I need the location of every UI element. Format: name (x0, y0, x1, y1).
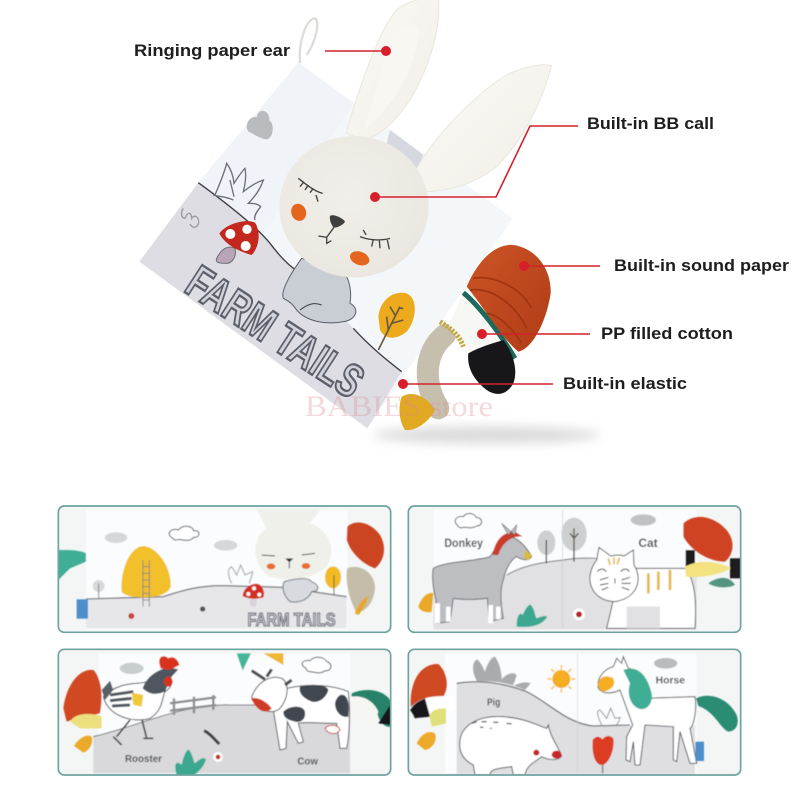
panel: rooster and cow page (58, 649, 392, 778)
red plush (411, 664, 447, 707)
callout: built-in sound paper: Built-in sound paper (614, 256, 789, 275)
sun icon (547, 665, 575, 693)
cloud icon (247, 111, 273, 139)
page title: FARM TAILS (247, 609, 336, 630)
hanging loop (300, 18, 317, 63)
donkey label: Donkey (444, 536, 483, 550)
dangling tail parts (399, 245, 551, 430)
main product: rabbit cloth book (139, 0, 600, 444)
rabbit body (283, 579, 318, 602)
rabbit body (283, 258, 356, 323)
grey plant (473, 657, 531, 690)
plant outline (229, 565, 253, 583)
rooster (102, 656, 179, 745)
plant outline (598, 708, 620, 726)
green plant (517, 605, 547, 627)
callout: built-in elastic: Built-in elastic (563, 374, 687, 393)
callout: built-in sound paper (519, 256, 789, 275)
pig label: Pig (487, 698, 500, 709)
panel: donkey and cat page (408, 506, 741, 632)
flower (573, 608, 585, 620)
cat (590, 547, 696, 628)
green plant (175, 750, 206, 778)
callout: built-in BB call (370, 114, 714, 202)
pig (460, 717, 562, 775)
grey cloud (631, 514, 656, 526)
watermark: BABIES store (305, 390, 493, 423)
yellow striped arm (70, 714, 102, 728)
callout: PP filled cotton (477, 324, 733, 343)
red plush (63, 670, 102, 722)
clouds (120, 663, 144, 674)
black and white tail (410, 696, 455, 718)
red plush (347, 523, 384, 568)
panel: pig and horse page (408, 649, 741, 775)
tulip (592, 736, 614, 773)
title on cover: FARM TAILS (177, 255, 373, 408)
mushroom icon (216, 221, 259, 263)
worm (204, 731, 219, 744)
rooster label: Rooster (125, 754, 162, 765)
horse (597, 657, 697, 765)
callout: ringing paper ear (134, 41, 391, 60)
grey tree (93, 580, 105, 592)
donkey (433, 523, 532, 623)
bunting (237, 653, 251, 671)
callout: built-in BB call: Built-in BB call (587, 114, 714, 133)
yellow stripe arm (429, 708, 446, 727)
yellow striped arm (685, 562, 731, 577)
label tag (695, 742, 704, 761)
rabbit tail ring (347, 567, 375, 613)
face details (289, 178, 390, 268)
rabbit head (255, 508, 331, 580)
green tail (696, 696, 738, 732)
yellow foot (74, 736, 92, 753)
flower (213, 752, 223, 762)
grey clouds (105, 532, 127, 543)
ground area (139, 183, 402, 428)
cloud (455, 514, 482, 528)
rabbit head (279, 136, 429, 277)
yellow foot (417, 732, 436, 750)
right rabbit ear (417, 65, 552, 192)
grass mark (182, 208, 199, 227)
cat label: Cat (638, 536, 658, 550)
plant outline (213, 163, 263, 220)
cow label: Cow (297, 757, 319, 768)
teal tail (58, 550, 86, 580)
yellow tree (378, 293, 415, 350)
label tag (77, 599, 88, 619)
book cover (139, 63, 513, 428)
left rabbit ear (346, 0, 439, 138)
callout: built-in elastic (398, 374, 687, 393)
floor shadow (373, 426, 600, 444)
cow (251, 669, 349, 750)
teal tail (352, 690, 392, 727)
grey cloud (654, 658, 677, 669)
red plush (683, 517, 732, 562)
flowers (128, 613, 134, 619)
horse label: Horse (656, 676, 685, 687)
yellow foot left (418, 593, 433, 612)
haystack with ladder (121, 546, 171, 598)
callout: ringing paper ear: Ringing paper ear (134, 41, 290, 60)
fence (170, 695, 216, 715)
grey trees (537, 530, 555, 555)
callout: PP filled cotton: PP filled cotton (601, 324, 733, 343)
mushroom (250, 598, 257, 606)
panel: farm tails page (58, 506, 391, 632)
yellow tree (325, 566, 341, 588)
